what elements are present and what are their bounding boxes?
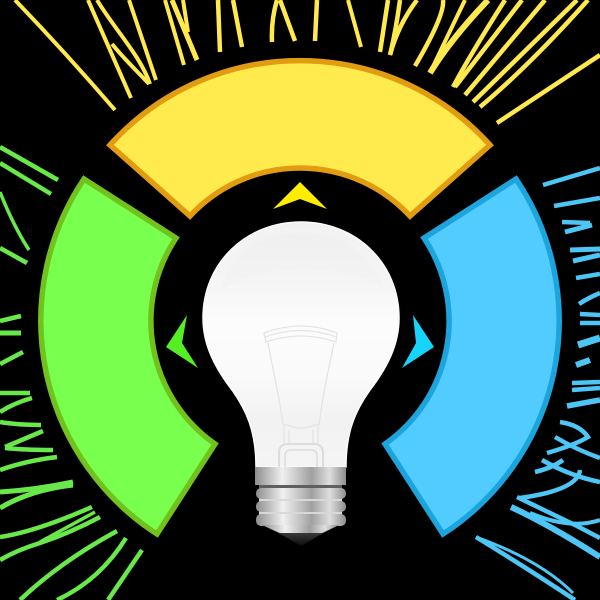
panel: green left segment	[41, 179, 215, 534]
icon: light bulb	[203, 222, 399, 546]
screw base	[255, 467, 346, 485]
arrow: yellow up	[273, 182, 327, 209]
base tip	[262, 525, 339, 546]
panel: blue right segment	[385, 179, 559, 534]
arrow: blue right	[402, 315, 434, 368]
rays: green	[0, 147, 142, 600]
rays: yellow	[15, 0, 600, 123]
rays: blue	[476, 168, 600, 600]
arrow: green left	[166, 315, 198, 368]
filament support	[264, 326, 337, 467]
bulb glass	[203, 222, 399, 467]
glass shading	[222, 233, 385, 290]
panel: yellow top segment	[110, 61, 490, 216]
